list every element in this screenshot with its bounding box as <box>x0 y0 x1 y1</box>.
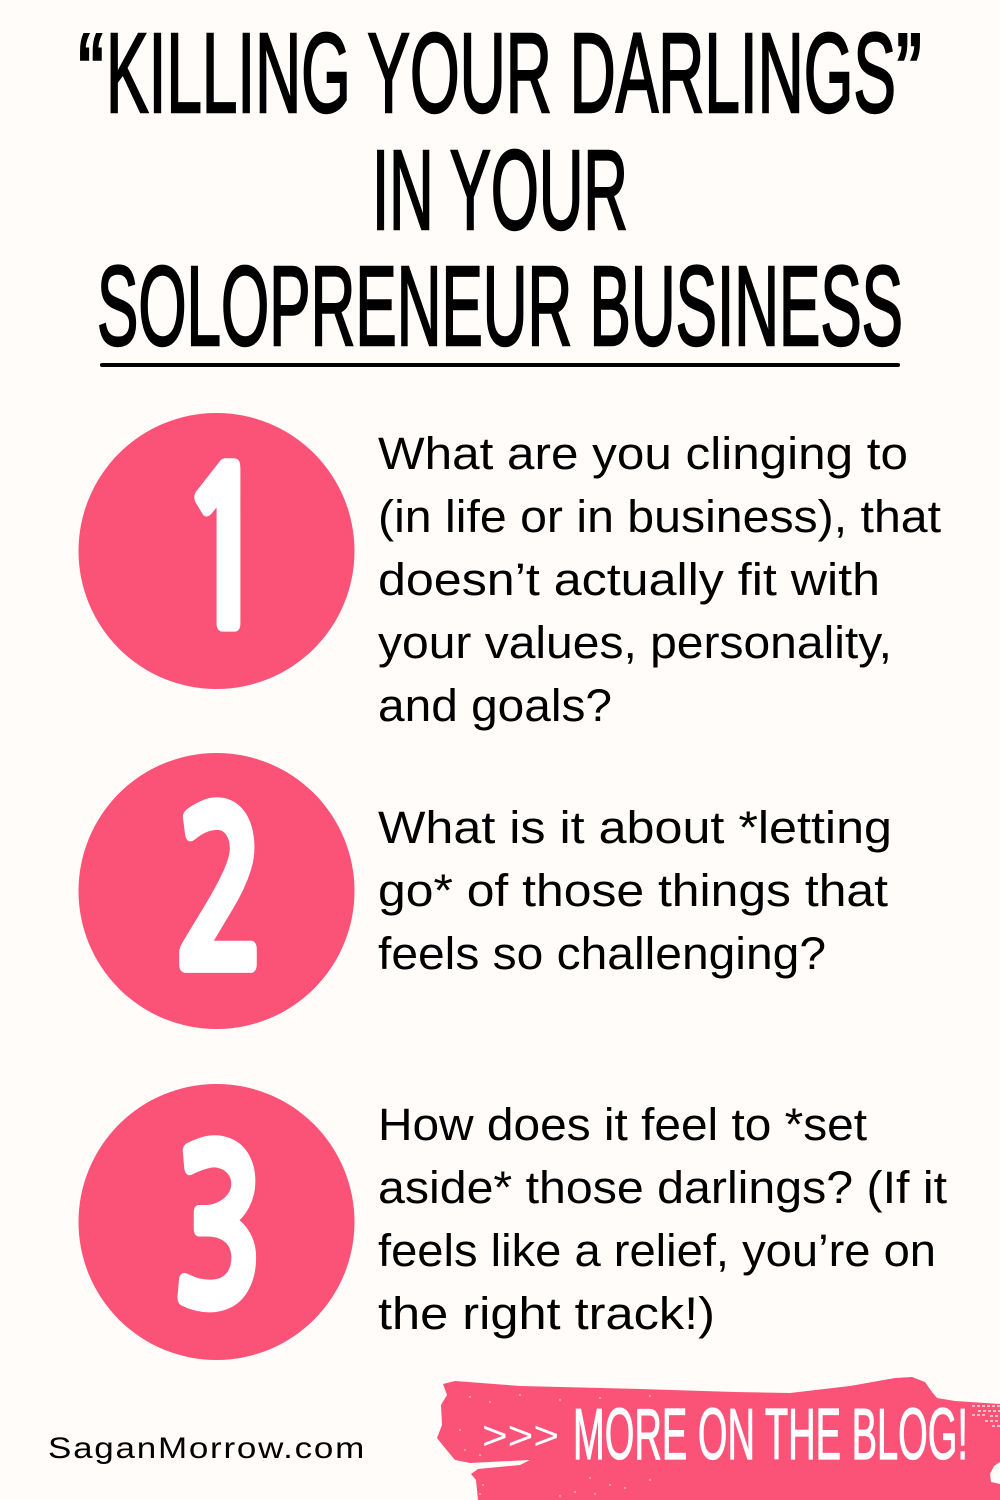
question 3 text <box>378 1099 948 1339</box>
question 1 text <box>378 428 942 731</box>
number badge 2 <box>78 753 354 1029</box>
question 2 text: go* of those things that <box>378 865 889 916</box>
website footer text: SaganMorrow.com <box>48 1432 366 1465</box>
question 3 text: feels like a relief, you’re on <box>378 1225 936 1276</box>
panel: question 1 <box>78 413 942 731</box>
title <box>78 10 922 369</box>
number badge 3 <box>78 1084 354 1360</box>
number badge 2: 2 <box>174 787 267 1000</box>
title: “ <box>78 10 104 136</box>
question 3 text: the right track!) <box>378 1288 715 1339</box>
number badge 3: 3 <box>172 1125 265 1338</box>
brush stroke background <box>437 1377 1000 1500</box>
title underline <box>100 363 900 367</box>
question 1 text: (in life or in business), that <box>378 491 942 542</box>
call to action banner <box>437 1377 1000 1500</box>
question 1 text: What are you clinging to <box>378 428 908 479</box>
question 3 text: How does it feel to *set <box>378 1099 868 1150</box>
brush speckles <box>459 1394 1000 1497</box>
number badge 1: 1 <box>178 446 272 659</box>
panel: question 3 <box>78 1084 948 1360</box>
question 1 text: doesn’t actually fit with <box>378 554 880 605</box>
question 1 text: and goals? <box>378 680 612 731</box>
banner arrows: >>> <box>482 1414 559 1458</box>
question 2 text <box>378 802 892 979</box>
title: ” <box>896 10 922 136</box>
question 2 text: feels so challenging? <box>378 928 826 979</box>
panel: question 2 <box>78 753 892 1029</box>
title: IN YOUR <box>372 127 628 253</box>
question 2 text: What is it about *letting <box>378 802 892 853</box>
number badge 1 <box>78 413 354 689</box>
question 1 text: your values, personality, <box>378 617 892 668</box>
question 3 text: aside* those darlings? (If it <box>378 1162 948 1213</box>
